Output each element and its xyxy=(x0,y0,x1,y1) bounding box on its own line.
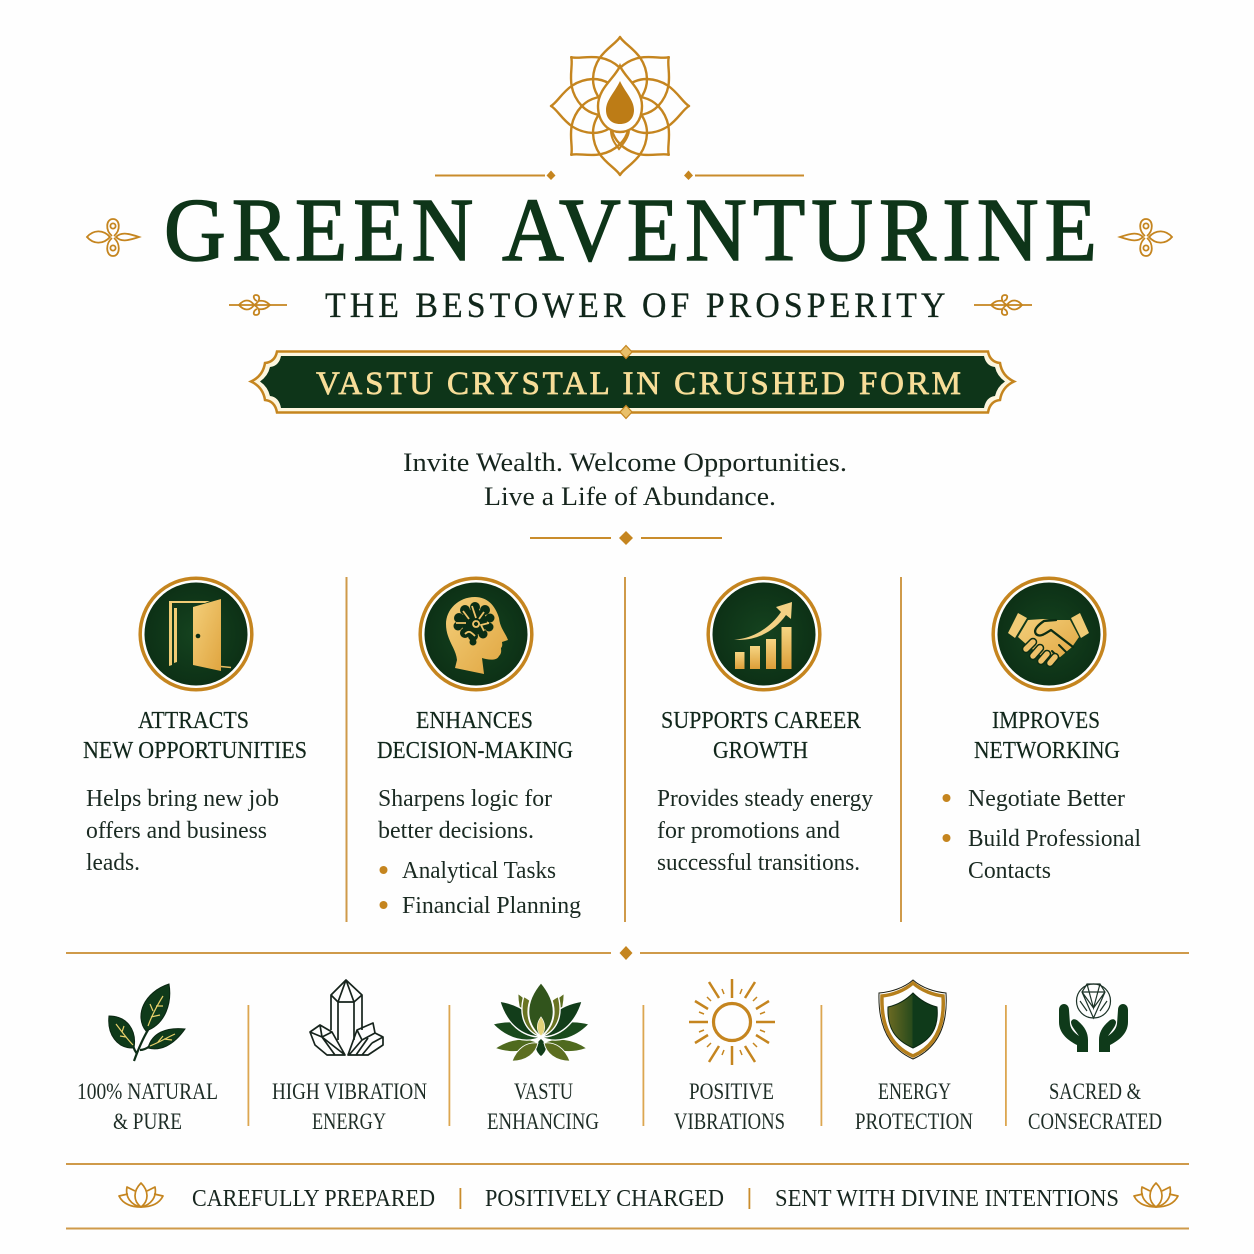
label: 100% NATURAL xyxy=(77,1079,218,1104)
heading xyxy=(661,708,861,764)
label xyxy=(674,1079,785,1134)
icon: crystal cluster xyxy=(310,980,383,1055)
body text: leads. xyxy=(86,850,140,876)
panel: supports career growth xyxy=(657,578,873,876)
tagline: Live a Life of Abundance. xyxy=(484,481,776,511)
footer text: carefully prepared: CAREFULLY PREPARED xyxy=(192,1186,435,1212)
bullet list: Analytical Tasks xyxy=(402,858,556,884)
feature: positive vibrations xyxy=(674,979,785,1134)
icon: head with brain xyxy=(420,578,532,690)
ornament: title left xyxy=(87,219,139,256)
footer band xyxy=(66,1163,1189,1230)
body text: successful transitions. xyxy=(657,850,860,876)
label: SACRED & xyxy=(1049,1079,1141,1104)
label: VIBRATIONS xyxy=(674,1109,785,1134)
label: ENERGY xyxy=(878,1079,951,1104)
label: PROTECTION xyxy=(855,1109,973,1134)
body text xyxy=(657,786,873,876)
tagline: Invite Wealth. Welcome Opportunities. xyxy=(403,447,847,477)
body text: Sharpens logic for xyxy=(378,786,552,812)
icon: growth chart xyxy=(708,578,820,690)
heading: ENHANCES xyxy=(416,708,533,734)
icon: top mandala flower with drop xyxy=(551,37,689,175)
title: GREEN AVENTURINE xyxy=(164,180,1097,279)
icon: open door xyxy=(140,578,252,690)
banner text: VASTU CRYSTAL IN CRUSHED FORM xyxy=(316,366,961,402)
heading xyxy=(83,708,307,764)
ornament: subtitle left xyxy=(229,295,287,315)
heading xyxy=(974,708,1120,764)
label: & PURE xyxy=(113,1109,182,1134)
heading: DECISION-MAKING xyxy=(377,738,573,764)
body text: for promotions and xyxy=(657,818,840,844)
heading xyxy=(377,708,573,764)
body text: offers and business xyxy=(86,818,267,844)
label: ENERGY xyxy=(312,1109,386,1134)
icon: sun xyxy=(689,979,775,1065)
icon: lotus xyxy=(491,982,591,1066)
label xyxy=(1028,1079,1162,1134)
heading: NEW OPPORTUNITIES xyxy=(83,738,307,764)
feature: natural and pure xyxy=(77,984,218,1134)
body text: Helps bring new job xyxy=(86,786,279,812)
label xyxy=(855,1079,973,1134)
heading: GROWTH xyxy=(713,738,808,764)
label: ENHANCING xyxy=(487,1109,599,1134)
icon: footer lotus left xyxy=(119,1183,163,1207)
label xyxy=(487,1079,599,1134)
feature: energy protection xyxy=(855,980,973,1134)
icon: footer lotus right xyxy=(1134,1183,1178,1207)
icon: hands holding gem xyxy=(1059,984,1128,1052)
label: CONSECRATED xyxy=(1028,1109,1162,1134)
icon: leaves xyxy=(109,984,185,1061)
icon: shield xyxy=(879,980,946,1059)
feature: vastu enhancing xyxy=(487,982,599,1134)
body text: Provides steady energy xyxy=(657,786,873,812)
bullet list: Contacts xyxy=(968,858,1051,884)
body text xyxy=(378,786,552,844)
label xyxy=(272,1079,427,1134)
bullet list xyxy=(380,858,581,919)
divider: tagline xyxy=(530,531,722,545)
icon: handshake xyxy=(993,578,1105,690)
heading: SUPPORTS CAREER xyxy=(661,708,861,734)
heading: NETWORKING xyxy=(974,738,1120,764)
heading: IMPROVES xyxy=(992,708,1100,734)
bullet list: Financial Planning xyxy=(402,893,581,919)
bullet list: Build Professional xyxy=(968,826,1141,852)
bullet list: Negotiate Better xyxy=(968,786,1125,812)
tagline xyxy=(403,447,847,511)
footer text: positively charged: POSITIVELY CHARGED xyxy=(485,1186,724,1212)
ornament: title right xyxy=(1120,219,1172,256)
label xyxy=(77,1079,218,1134)
feature: high vibration energy xyxy=(272,980,427,1134)
panel: improves networking xyxy=(942,578,1141,884)
banner xyxy=(251,346,1014,418)
label: HIGH VIBRATION xyxy=(272,1079,427,1104)
panel: attracts new opportunities xyxy=(83,578,307,876)
label: VASTU xyxy=(514,1079,573,1104)
divider: left top rule xyxy=(435,170,556,180)
divider: middle rule xyxy=(66,946,1189,960)
bullet list xyxy=(942,786,1141,884)
ornament: subtitle right xyxy=(974,295,1032,315)
divider: right top rule xyxy=(684,170,804,180)
feature: sacred and consecrated xyxy=(1028,984,1162,1134)
footer text: sent with divine intentions: SENT WITH DIVINE INTENTIONS xyxy=(775,1186,1119,1212)
label: POSITIVE xyxy=(689,1079,774,1104)
panel: enhances decision-making xyxy=(377,578,581,919)
body text xyxy=(86,786,279,876)
subtitle: THE BESTOWER OF PROSPERITY xyxy=(325,285,945,325)
heading: ATTRACTS xyxy=(138,708,249,734)
body text: better decisions. xyxy=(378,818,534,844)
